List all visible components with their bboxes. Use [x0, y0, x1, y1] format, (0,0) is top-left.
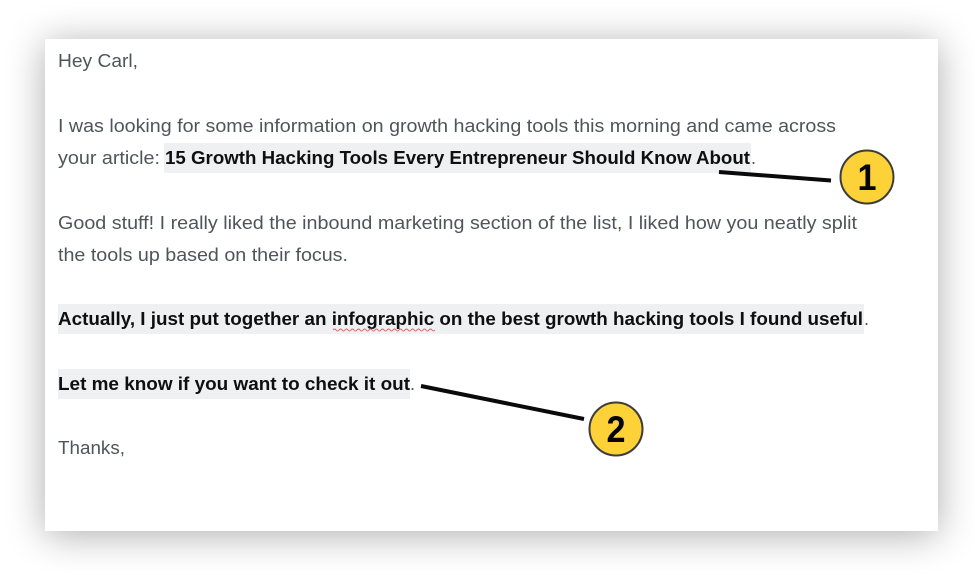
- paragraph: intro: your article:: [58, 148, 160, 168]
- callout: number 1: [840, 150, 894, 204]
- paragraph: praise: the tools up based on their focus.: [58, 245, 348, 265]
- paragraph: praise: Good stuff! I really liked the inbound marketing section of the list, I liked how you neatly split: [58, 213, 857, 233]
- paragraph: intro: 15 Growth Hacking Tools Every Entrepreneur Should Know About: [165, 148, 750, 168]
- paragraph: call to action: .: [410, 374, 415, 394]
- paragraph: praise: [58, 213, 857, 265]
- greeting: Hey Carl,: [58, 51, 138, 71]
- panel: email card: [45, 39, 938, 531]
- callout: number 2: [590, 402, 642, 456]
- callout: number 1: 1: [858, 157, 876, 198]
- callout: number 2: 2: [606, 409, 626, 450]
- arrow: line to callout 1: [719, 172, 831, 180]
- paragraph: intro: .: [751, 148, 756, 168]
- paragraph: intro: I was looking for some information on growth hacking tools this morning and came across: [58, 116, 836, 136]
- paragraph: intro: [58, 116, 836, 173]
- arrow: line to callout 2: [421, 386, 584, 419]
- sign-off: Thanks,: [58, 438, 125, 458]
- paragraph: infographic pitch: .: [864, 309, 869, 329]
- paragraph: call to action: [58, 369, 415, 399]
- paragraph: infographic pitch: Actually, I just put together an infographic on the best growth hacking tools I found useful: [58, 309, 863, 329]
- paragraph: infographic pitch: [58, 304, 869, 334]
- paragraph: call to action: Let me know if you want to check it out: [58, 374, 410, 394]
